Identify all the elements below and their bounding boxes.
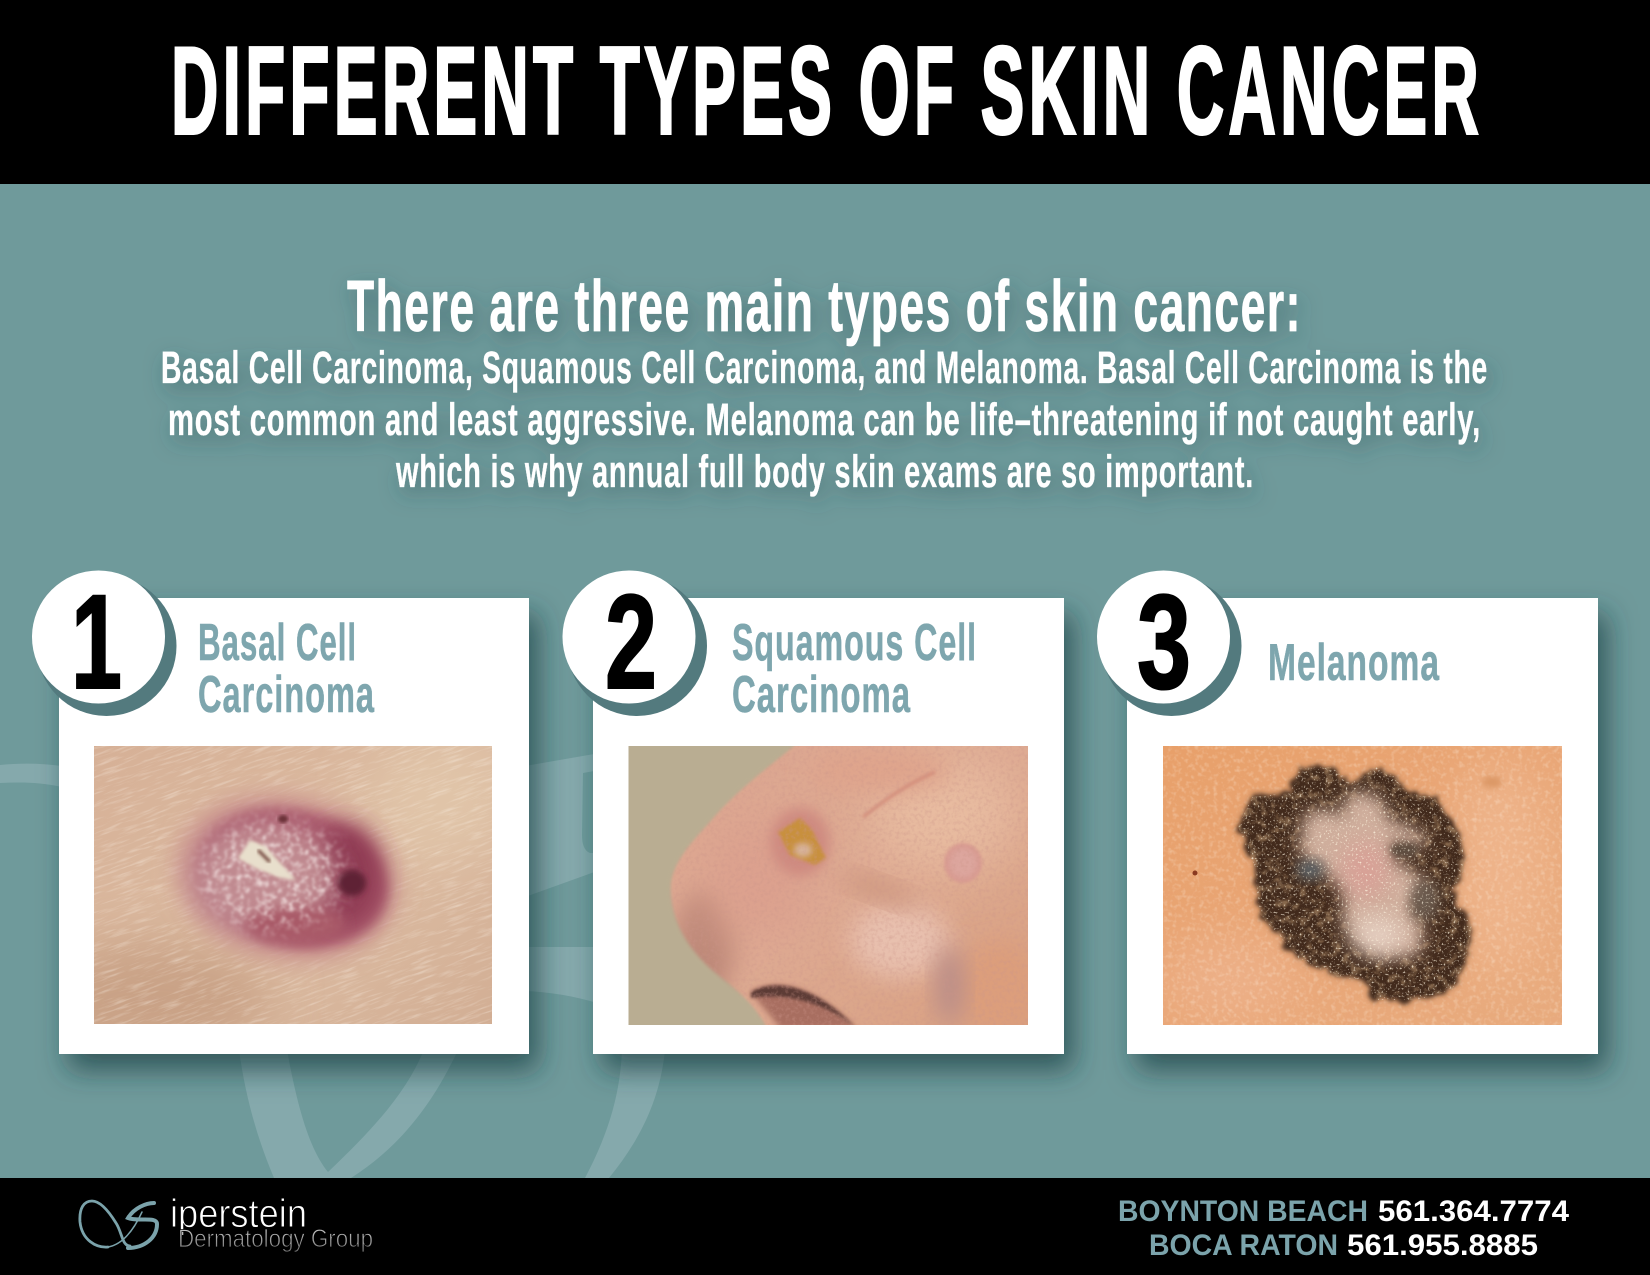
watermark notch <box>582 770 600 853</box>
number badge 3 <box>1097 568 1242 717</box>
intro text block <box>161 267 1488 497</box>
number badge 1 <box>32 568 176 717</box>
card <box>1127 598 1598 1054</box>
paragraph <box>161 342 1488 497</box>
number badge 1: 1 <box>71 568 122 717</box>
photo: squamous cell lesion on nose <box>628 746 1028 1025</box>
label: Carcinoma <box>732 666 911 724</box>
label: Basal Cell <box>198 614 357 672</box>
header band <box>0 0 1650 184</box>
label: Carcinoma <box>198 666 375 724</box>
label: Melanoma <box>1268 634 1440 692</box>
Boca Raton line: 561.955.8885 <box>1347 1229 1538 1262</box>
panel: squamous cell carcinoma <box>562 568 1064 1054</box>
Boynton Beach line: 561.364.7774 <box>1378 1195 1569 1228</box>
panel: basal cell carcinoma <box>32 570 556 1088</box>
Boynton Beach line: BOYNTON BEACH <box>1118 1195 1368 1228</box>
logo <box>80 1192 373 1253</box>
photo: basal cell lesion <box>94 746 492 1024</box>
number badge 2: 2 <box>605 568 657 717</box>
logo tagline: Dermatology Group <box>178 1225 373 1253</box>
Boca Raton line <box>1149 1229 1538 1262</box>
card <box>593 598 1064 1054</box>
number badge 2 <box>562 568 707 717</box>
number badge 3: 3 <box>1137 568 1191 717</box>
panel: melanoma <box>1097 568 1598 1054</box>
label <box>198 614 375 724</box>
Boynton Beach line <box>1118 1195 1569 1228</box>
phone numbers <box>1118 1195 1569 1262</box>
photo: melanoma lesion <box>1160 746 1562 1025</box>
label: Squamous Cell <box>732 614 977 672</box>
label <box>732 614 977 724</box>
Boca Raton line: BOCA RATON <box>1149 1229 1338 1262</box>
card <box>59 598 529 1054</box>
logo wordmark: iperstein <box>170 1192 307 1236</box>
logo swirl <box>80 1201 157 1248</box>
footer band <box>0 1178 1650 1275</box>
background watermark logo <box>0 753 665 1178</box>
